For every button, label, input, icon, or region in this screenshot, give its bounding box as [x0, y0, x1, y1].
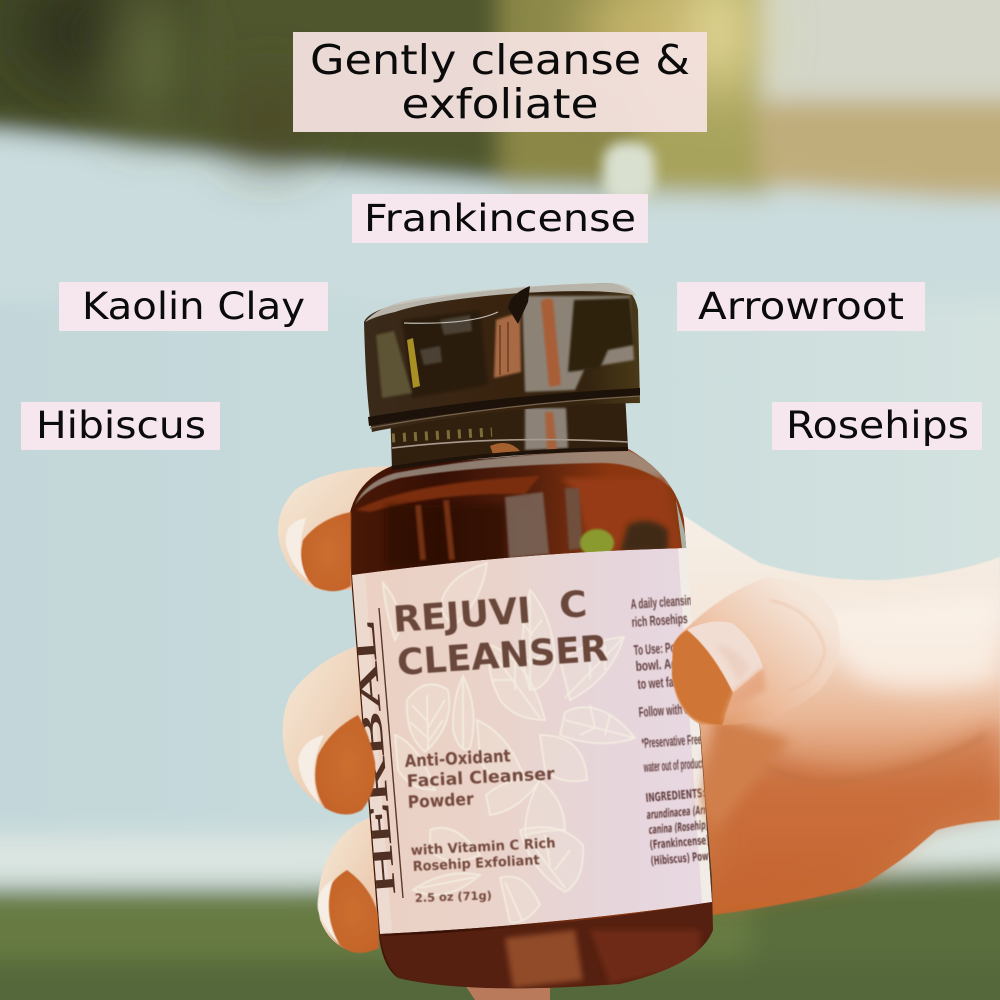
ingredient: Hibiscus	[21, 402, 220, 450]
product description: Anti-Oxidant	[404, 746, 511, 772]
cap	[364, 283, 640, 432]
side copy: INGREDIENTS:	[645, 786, 706, 805]
palm shading	[720, 590, 1000, 905]
heading: gently cleanse and exfoliate: exfoliate	[402, 80, 598, 128]
thumb nail	[687, 622, 763, 693]
product description: with Vitamin C Rich	[410, 835, 556, 859]
ingredient: Rosehips: Rosehips	[786, 404, 969, 447]
finger one	[301, 512, 351, 591]
side copy: canina (Rosehip)	[648, 818, 709, 837]
finger below bottle	[465, 985, 550, 1000]
side copy: To Use: Pour	[633, 639, 684, 658]
thumb tip	[672, 630, 733, 725]
palm and wrist	[680, 515, 1000, 915]
ingredient: Kaolin Clay	[59, 282, 328, 331]
side copy: arundinacea (Arr	[646, 803, 708, 822]
product name: C	[558, 584, 589, 627]
bottle shoulder and body	[348, 447, 713, 988]
trees at top	[0, 0, 520, 190]
product description: Rosehip Exfoliant	[412, 852, 541, 875]
ingredient: Arrowroot: Arrowroot	[698, 285, 904, 328]
heading: gently cleanse and exfoliate	[293, 32, 707, 132]
finger two	[315, 715, 375, 815]
ingredient: Frankincense: Frankincense	[364, 197, 636, 240]
brand name: HERBAL	[347, 618, 402, 896]
product label: water out of product	[643, 755, 704, 775]
ingredient: Kaolin Clay: Kaolin Clay	[82, 285, 305, 328]
vertical brand line	[379, 608, 403, 898]
side copy: (Hibiscus) Pow	[650, 849, 709, 868]
amber bottle	[348, 283, 713, 988]
thumb	[672, 577, 840, 830]
side copy: Follow with one	[638, 700, 699, 720]
product description: Facial Cleanser	[406, 764, 556, 792]
product name: CLEANSER	[396, 628, 609, 684]
product description	[404, 746, 556, 905]
product name: REJUVI	[392, 590, 532, 641]
product label	[347, 548, 712, 934]
finger three	[322, 870, 379, 953]
lower glass	[380, 902, 713, 988]
hand holding bottle	[278, 466, 1000, 950]
heading: gently cleanse and exfoliate: Gently cleanse &	[310, 36, 690, 84]
ingredient: Arrowroot	[677, 282, 925, 331]
neck	[390, 392, 628, 470]
side copy: to wet face	[637, 673, 684, 692]
finger backs	[278, 466, 400, 950]
product description: Powder	[407, 790, 475, 813]
white strip and grass	[0, 835, 1000, 880]
body reflections	[356, 476, 540, 512]
side copy	[630, 591, 710, 868]
white post	[603, 142, 655, 202]
ingredient: Hibiscus: Hibiscus	[36, 404, 206, 447]
side copy: bowl. Add	[635, 655, 684, 674]
side copy: rich Rosehips	[631, 610, 688, 630]
product name	[394, 589, 608, 676]
wall top edge	[0, 136, 1000, 300]
botanical line art	[383, 563, 635, 922]
side copy: *Preservative Free	[641, 731, 702, 751]
side copy: A daily cleansing	[630, 591, 697, 612]
side copy: (Frankincense)	[649, 833, 710, 852]
finger pads over bottle	[286, 512, 379, 953]
product description: 2.5 oz (71g)	[415, 888, 492, 905]
